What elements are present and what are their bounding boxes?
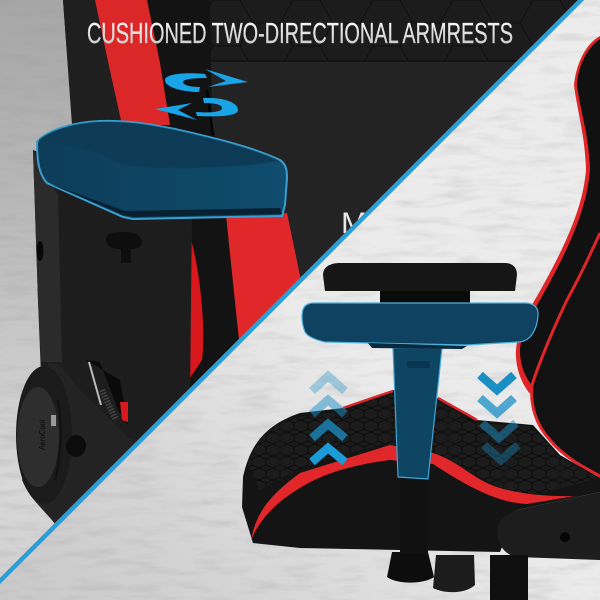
blue armrest pad (lower position) bbox=[302, 303, 538, 345]
partial background letter: M bbox=[341, 207, 367, 240]
icon: down chevrons bbox=[480, 375, 518, 460]
icon: up chevrons bbox=[312, 376, 345, 462]
black armrest pad (upper position) bbox=[323, 263, 517, 303]
black outer side of seat back bbox=[63, 0, 240, 420]
seat hex panel bbox=[248, 393, 598, 497]
panel: chair with height adjustable armrest bbox=[242, 36, 600, 600]
blue arm post bbox=[393, 348, 442, 479]
lever knob 2 bbox=[433, 555, 475, 592]
wheel logo: AeroCool bbox=[38, 420, 47, 450]
lower arrow bbox=[155, 98, 238, 120]
seat back fabric bbox=[210, 0, 578, 278]
red side stripe bbox=[95, 0, 170, 125]
left panel highlight bbox=[63, 0, 122, 125]
pad top surface bbox=[38, 122, 279, 168]
recline wheel bbox=[16, 366, 72, 504]
seat top red piping bbox=[343, 391, 477, 420]
seat back outer lobe bbox=[516, 36, 600, 480]
small red strip bbox=[190, 240, 203, 378]
recline mechanism bbox=[86, 360, 128, 425]
seam bbox=[207, 90, 213, 135]
icon: rotation arrows bbox=[155, 69, 248, 120]
side hole bbox=[36, 241, 44, 261]
pad underside shadow bbox=[368, 343, 467, 349]
pad underside bbox=[50, 184, 282, 217]
grey concrete background bbox=[0, 0, 72, 577]
side panel hole bbox=[560, 532, 570, 542]
upper arrow bbox=[165, 69, 248, 92]
wheel housing bbox=[22, 402, 121, 524]
inner cushion red outline bbox=[532, 233, 600, 476]
adjust knob bbox=[106, 232, 142, 263]
side panel bbox=[497, 492, 600, 560]
post button bbox=[407, 361, 430, 368]
armrest post bbox=[33, 150, 192, 465]
armrest lower pole bbox=[400, 478, 428, 554]
seat cushion bbox=[242, 390, 600, 552]
wheel knob bbox=[66, 435, 86, 457]
lower red stripe bbox=[226, 213, 300, 340]
lever knob 1 bbox=[387, 552, 434, 583]
seat back black fill bbox=[520, 39, 600, 470]
post left face bbox=[33, 150, 62, 362]
inner cushion bbox=[532, 233, 600, 476]
highlighted armrest pad close-up bbox=[37, 121, 287, 219]
gas lift pole bbox=[490, 555, 528, 600]
seat red stripe bbox=[251, 445, 575, 540]
